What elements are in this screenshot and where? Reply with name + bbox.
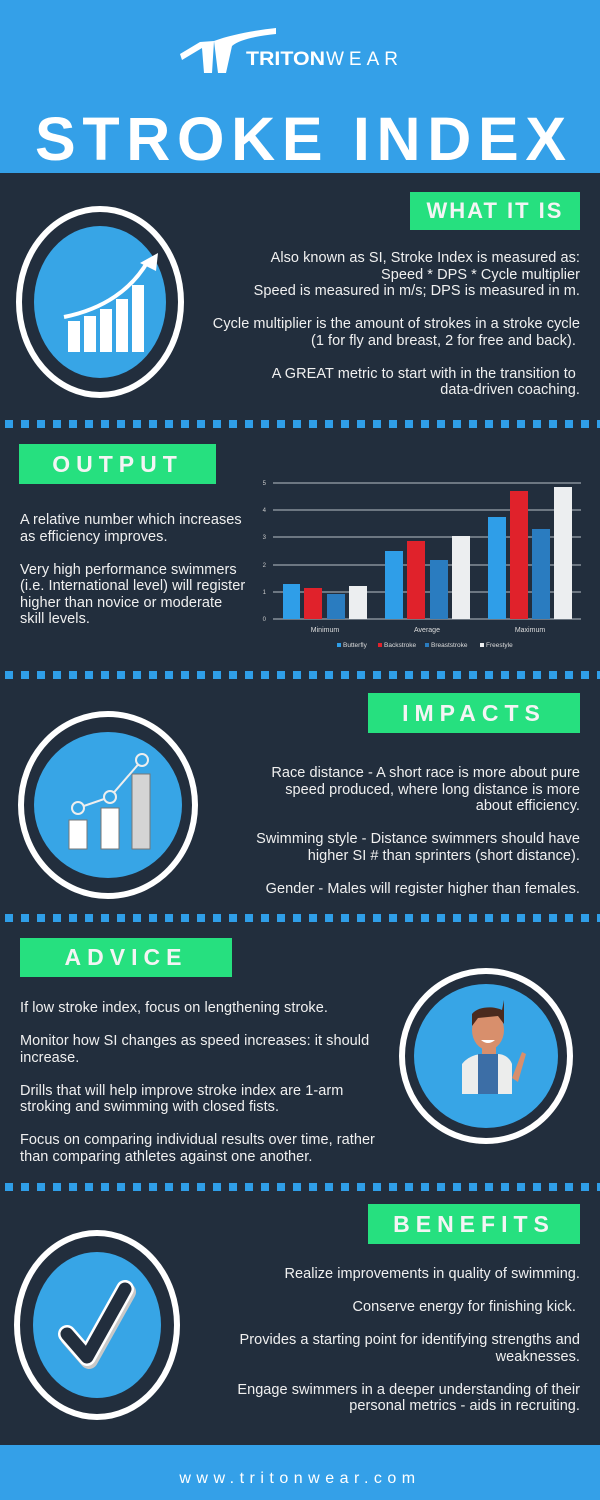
bar chart: [262, 480, 581, 649]
bar chart: 0: [263, 617, 267, 623]
text: impacts: [256, 765, 580, 896]
footer: [0, 1445, 600, 1500]
icon: coach person: [399, 968, 573, 1144]
text: what it is: (1 for fly and breast, 2 for free and back).: [311, 332, 576, 348]
bar chart: Butterfly: [343, 642, 368, 649]
heading: impacts: IMPACTS: [402, 700, 546, 726]
text: impacts: about efficiency.: [476, 798, 580, 814]
text: benefits: Provides a starting point for identifying strengths and: [240, 1332, 580, 1348]
logo: TRITON: [246, 49, 325, 70]
bar chart: Breaststroke: [431, 642, 468, 649]
text: benefits: weaknesses.: [496, 1348, 580, 1364]
text: advice: Focus on comparing individual results over time, rather: [20, 1132, 375, 1148]
text: output: A relative number which increases: [20, 512, 242, 528]
panel: impacts: [18, 693, 580, 899]
text: what it is: [213, 250, 580, 398]
text: output: (i.e. International level) will register: [20, 578, 245, 594]
panel: what it is: [16, 192, 580, 398]
header band: [0, 0, 600, 173]
bar chart: Backstroke: [384, 642, 417, 649]
text: output: Very high performance swimmers: [20, 562, 237, 578]
bar chart: 3: [263, 535, 267, 541]
text: benefits: Engage swimmers in a deeper understanding of their: [237, 1382, 580, 1398]
logo: WEAR: [326, 49, 400, 70]
text: advice: [20, 1000, 375, 1164]
text: benefits: personal metrics - aids in recruiting.: [349, 1398, 580, 1414]
text: benefits: Conserve energy for finishing kick.: [353, 1299, 576, 1315]
bar chart: 2: [263, 563, 267, 569]
text: advice: than comparing athletes against one another.: [20, 1148, 312, 1164]
heading: output: [19, 444, 216, 484]
heading: advice: ADVICE: [65, 944, 187, 970]
text: what it is: Also known as SI, Stroke Index is measured as:: [271, 250, 580, 266]
text: output: [20, 512, 245, 627]
icon: bar and line chart: [18, 711, 198, 899]
text: output: as efficiency improves.: [20, 528, 168, 544]
icon: checkmark: [14, 1230, 180, 1420]
text: benefits: Realize improvements in quality of swimming.: [284, 1266, 580, 1282]
text: advice: Drills that will help improve stroke index are 1-arm: [20, 1082, 343, 1098]
heading: impacts: [368, 693, 580, 733]
text: advice: increase.: [20, 1050, 79, 1066]
heading: advice: [20, 938, 232, 977]
text: advice: stroking and swimming with closed fists.: [20, 1099, 279, 1115]
bar chart: Average: [414, 627, 440, 634]
text: what it is: Speed * DPS * Cycle multiplier: [381, 266, 580, 282]
text: output: higher than novice or moderate: [20, 594, 222, 610]
panel: advice: [20, 938, 573, 1164]
icon: growth chart: [16, 206, 184, 398]
text: impacts: Race distance - A short race is more about pure: [271, 765, 580, 781]
text: what it is: data-driven coaching.: [440, 382, 580, 398]
logo: [180, 28, 400, 73]
text: impacts: higher SI # than sprinters (short distance).: [308, 848, 580, 864]
heading: what it is: WHAT IT IS: [427, 198, 563, 223]
heading: benefits: [368, 1204, 580, 1244]
text: what it is: A GREAT metric to start with in the transition to: [272, 366, 576, 382]
text: advice: If low stroke index, focus on lengthening stroke.: [20, 1000, 328, 1016]
heading: output: OUTPUT: [52, 450, 183, 476]
bar chart: 5: [263, 481, 267, 487]
bar chart: Maximum: [515, 627, 545, 634]
footer url: www.tritonwear.com: [179, 1470, 421, 1487]
heading: benefits: BENEFITS: [393, 1210, 555, 1236]
text: impacts: Swimming style - Distance swimmers should have: [256, 831, 580, 847]
bar chart: 1: [263, 590, 267, 596]
bar chart: Freestyle: [486, 642, 513, 649]
text: output: skill levels.: [20, 611, 90, 627]
bar chart: 4: [263, 508, 267, 514]
text: advice: Monitor how SI changes as speed increases: it should: [20, 1033, 369, 1049]
text: what it is: Cycle multiplier is the amount of strokes in a stroke cycle: [213, 316, 580, 332]
panel: benefits: [14, 1204, 580, 1420]
heading: what it is: [410, 192, 580, 230]
text: impacts: speed produced, where long distance is more: [285, 782, 580, 798]
panel: output: [19, 444, 581, 649]
text: benefits: [237, 1266, 580, 1414]
text: what it is: Speed is measured in m/s; DPS is measured in m.: [254, 283, 580, 299]
bar chart: Minimum: [311, 627, 339, 634]
text: impacts: Gender - Males will register higher than females.: [266, 880, 580, 896]
